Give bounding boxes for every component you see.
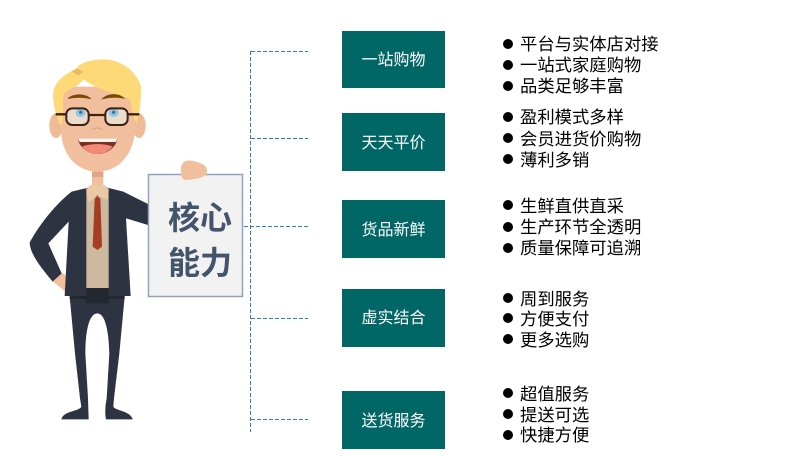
left hand xyxy=(53,273,66,291)
jacket body xyxy=(30,188,148,296)
sign card: 核心能力 xyxy=(148,174,242,296)
tie xyxy=(93,196,102,250)
bullet list 4: 方便支付 xyxy=(520,309,589,329)
label box: 货品新鲜 xyxy=(342,200,445,258)
nose xyxy=(93,128,103,130)
label box: 一站购物: 一站购物 xyxy=(361,51,426,69)
collar xyxy=(86,185,109,203)
bullet list 4: 更多选购 xyxy=(520,330,589,350)
bullet list 2: 盈利模式多样 xyxy=(520,107,624,127)
icon: hand holding sign xyxy=(181,160,207,180)
bullet list 2: 薄利多销 xyxy=(520,150,589,170)
glasses and eyes xyxy=(56,108,139,125)
bullet list 5: 超值服务 xyxy=(520,384,589,404)
legs and shoes xyxy=(61,295,133,419)
bullet list 5: 快捷方便 xyxy=(520,425,589,445)
bullet list 4: 周到服务 xyxy=(520,289,589,309)
bullet list 5 xyxy=(503,384,589,445)
character: businessman xyxy=(30,59,148,419)
connector tree xyxy=(244,51,308,432)
bullet list 3: 生鲜直供直采 xyxy=(520,196,624,216)
bullet list 5: 提送可选 xyxy=(520,405,589,425)
label box: 送货服务: 送货服务 xyxy=(361,412,426,430)
label box: 一站购物 xyxy=(342,31,445,88)
mouth xyxy=(78,138,117,154)
eyebrows xyxy=(68,95,91,99)
neck, torso and head xyxy=(30,59,148,303)
bullet list 1 xyxy=(503,34,659,96)
bullet list 1: 平台与实体店对接 xyxy=(520,34,659,54)
bullet list 3 xyxy=(503,196,641,258)
bullet list 3: 质量保障可追溯 xyxy=(520,238,641,258)
shirt xyxy=(86,188,109,288)
label box: 天天平价 xyxy=(342,113,445,171)
bullet list 3: 生产环节全透明 xyxy=(520,217,641,237)
bullet list 1: 一站式家庭购物 xyxy=(520,55,641,75)
sign card: 核心能力: 核心 xyxy=(168,200,232,236)
sign card: 核心能力: 能力 xyxy=(168,245,232,281)
bullet list 1: 品类足够丰富 xyxy=(520,76,624,96)
label box: 虚实结合 xyxy=(342,289,445,347)
label box: 虚实结合: 虚实结合 xyxy=(361,309,426,327)
bullet list 2 xyxy=(503,107,641,170)
bullet list 4 xyxy=(503,289,589,350)
hair xyxy=(53,59,141,124)
label box: 天天平价: 天天平价 xyxy=(361,135,426,152)
label box: 货品新鲜: 货品新鲜 xyxy=(361,221,426,239)
label box: 送货服务 xyxy=(342,391,445,449)
face xyxy=(61,87,135,172)
ears xyxy=(49,113,63,138)
neck xyxy=(92,167,103,190)
bullet list 2: 会员进货价购物 xyxy=(520,129,641,149)
